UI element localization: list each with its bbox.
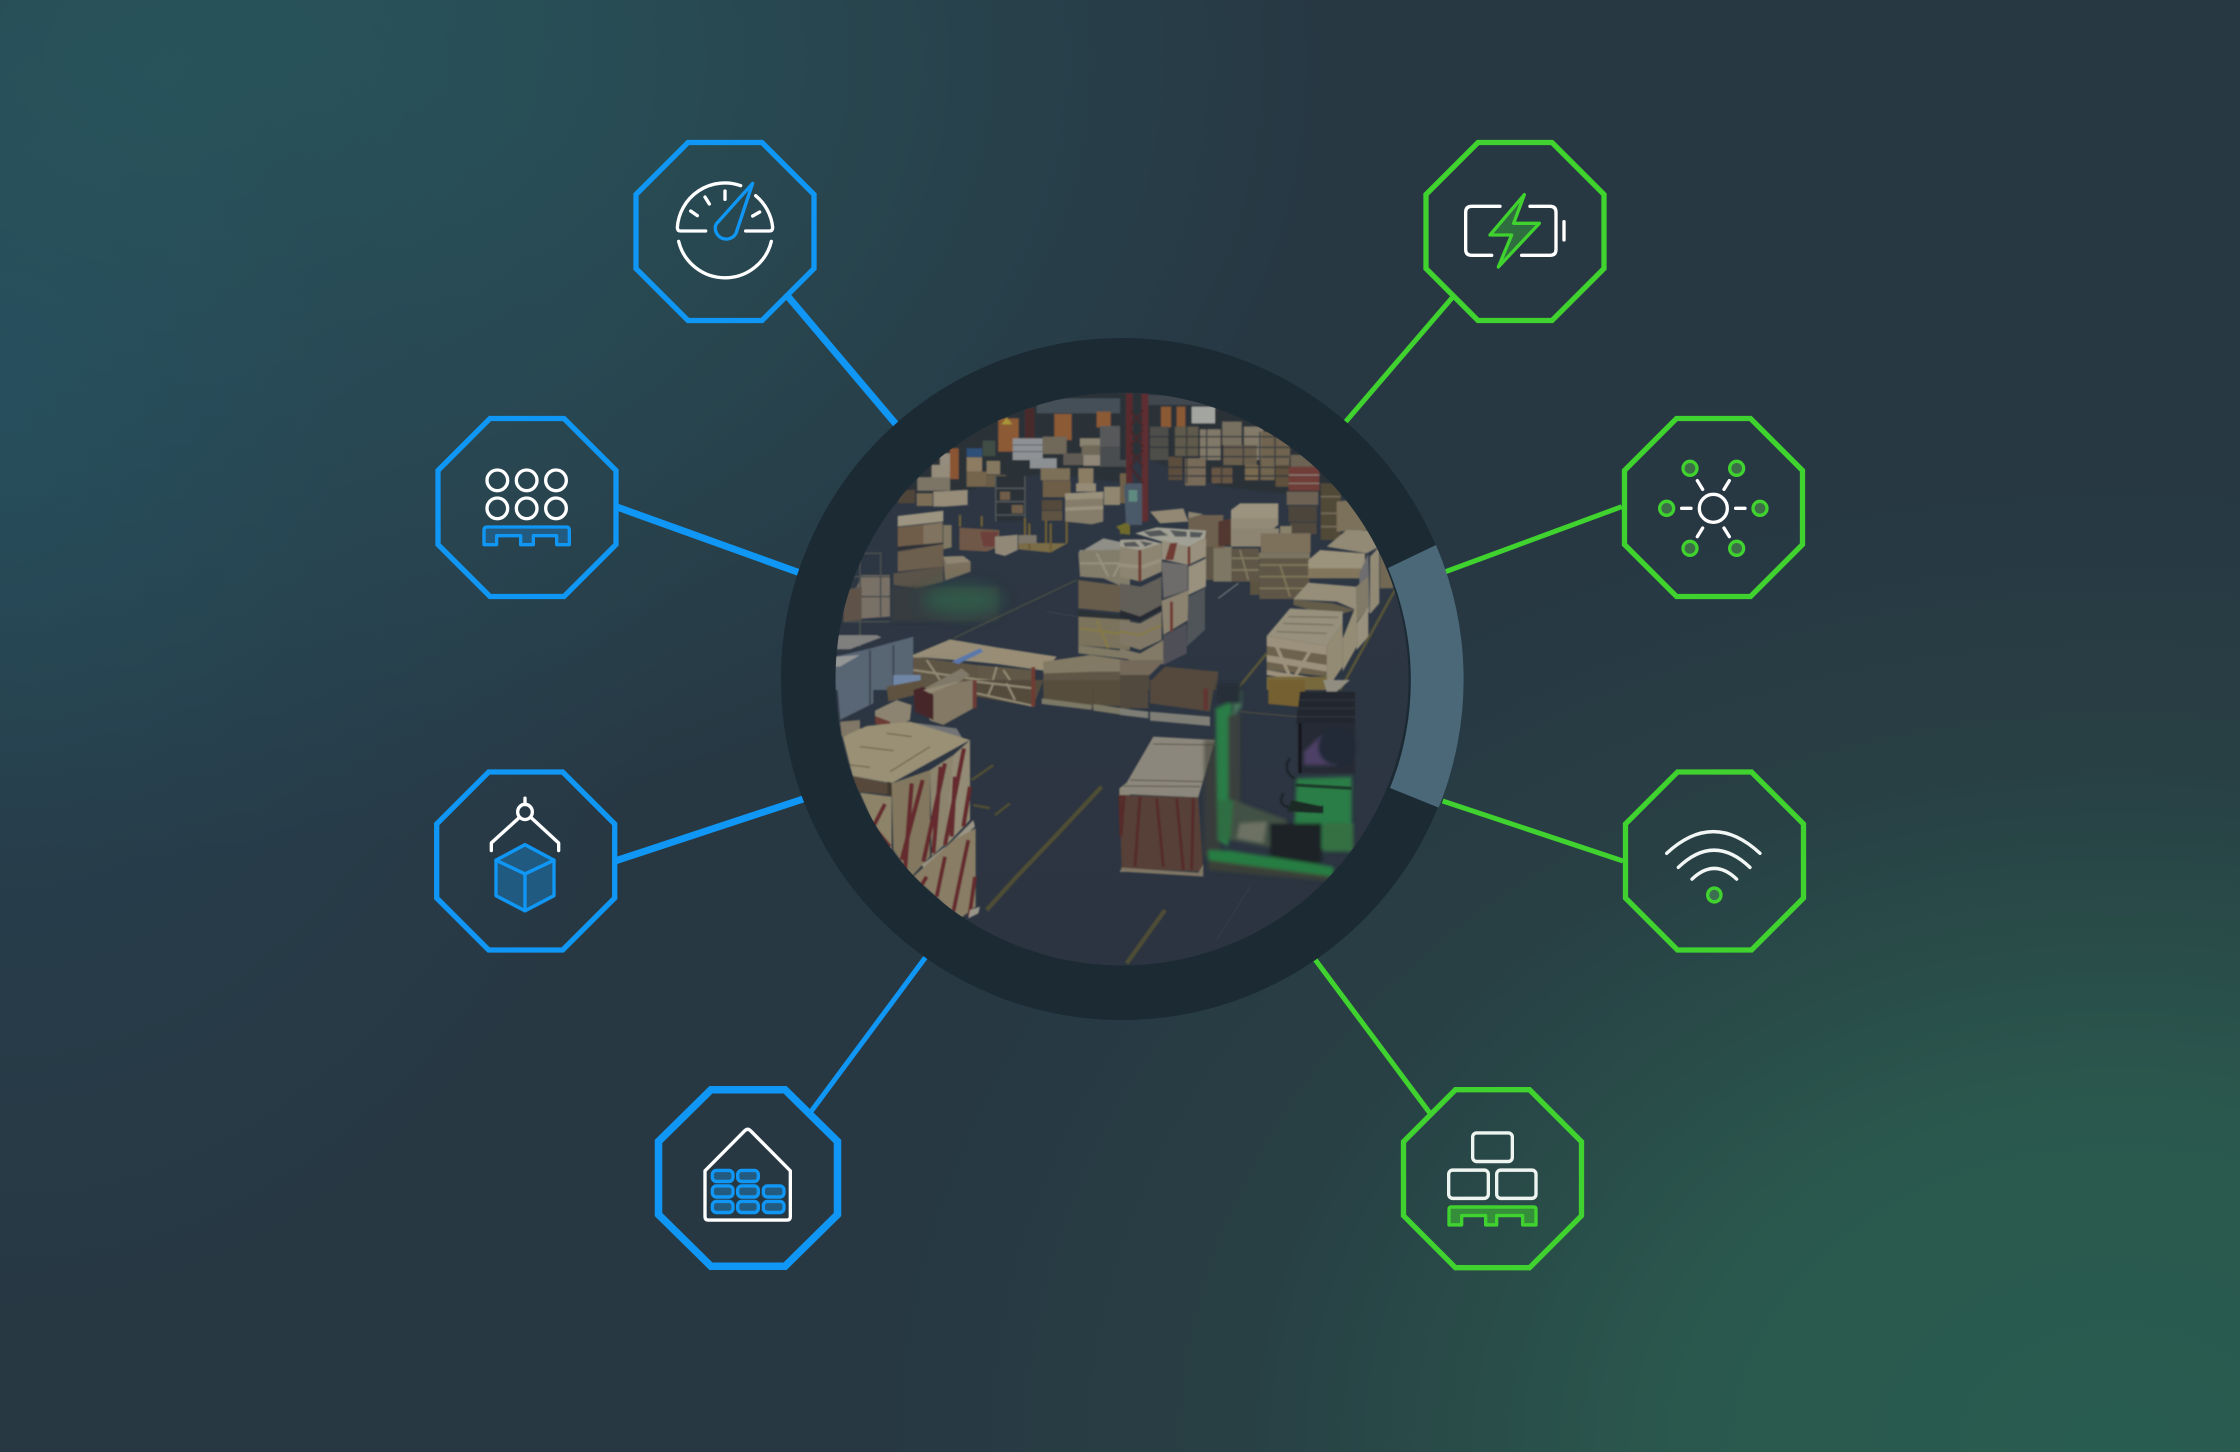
bottom left boxes <box>1120 660 1165 675</box>
floor markings <box>987 787 1102 910</box>
photo quadrant: lower right <box>1120 680 1355 963</box>
octagon frame: wifi <box>1626 772 1804 950</box>
right box edge <box>1120 838 1121 839</box>
load crate <box>1120 737 1215 797</box>
warehouse photo in centre circle <box>830 390 1420 980</box>
connector: pallet circles to hub <box>617 507 803 574</box>
hub and spoke diagram <box>434 140 1806 1270</box>
icon: speed gauge <box>677 183 773 278</box>
octagon frame: network <box>1624 418 1802 596</box>
octagon frame: battery <box>1426 142 1604 320</box>
photo quadrant: lower left <box>837 680 1130 920</box>
left pallets <box>898 511 943 527</box>
connector: wifi to hub <box>1443 801 1623 861</box>
photo quadrant: upper left <box>830 390 1130 690</box>
node: crane lifting box <box>437 772 615 950</box>
front big box <box>840 720 860 737</box>
green blur <box>892 587 998 622</box>
columns <box>1126 393 1133 483</box>
right rows of crates <box>1327 530 1379 553</box>
centre stack top left <box>1078 548 1131 586</box>
node: wifi <box>1626 772 1804 950</box>
slate ring segment <box>1388 545 1464 808</box>
octagon frame: gauge <box>636 142 814 320</box>
node: network hub <box>1624 418 1802 596</box>
node: pallet of circles <box>438 418 616 596</box>
icon: charging battery <box>1466 195 1564 267</box>
photo quadrant: upper right <box>1120 390 1395 690</box>
connector: stacked boxes to hub <box>1312 955 1430 1113</box>
node: stacked boxes <box>1404 1090 1582 1268</box>
icon: warehouse with bricks <box>705 1129 790 1220</box>
icon: crane claw with cube <box>491 798 559 911</box>
octagon frame: stacked boxes <box>1404 1090 1582 1268</box>
icon: wifi signal <box>1667 832 1760 902</box>
octagon frame: pallet of circles <box>438 418 616 596</box>
dark ring around photo <box>808 365 1436 993</box>
left metal rack <box>856 574 891 620</box>
cabinet <box>835 637 913 690</box>
node: warehouse <box>658 1090 838 1266</box>
icon: rolls on pallet <box>484 470 569 545</box>
floor streak <box>953 580 1077 638</box>
connector: warehouse to hub <box>811 951 930 1112</box>
connector: network to hub <box>1442 507 1622 573</box>
icon: network nodes <box>1660 461 1767 555</box>
node: battery <box>1426 142 1604 320</box>
node: gauge <box>636 142 814 320</box>
connector: gauge to hub <box>787 295 900 429</box>
floor lines <box>1237 590 1395 690</box>
stack front <box>1135 527 1206 547</box>
connector: crane to hub <box>615 797 808 861</box>
icon: boxes on pallet <box>1449 1133 1536 1225</box>
octagon frame: warehouse <box>658 1090 838 1266</box>
octagon frame: crane <box>437 772 615 950</box>
middle crates <box>1231 503 1278 522</box>
forklift group <box>1204 683 1353 882</box>
floor marking <box>1127 910 1165 963</box>
mid crate row <box>913 639 1057 671</box>
connector: battery to hub <box>1342 297 1453 426</box>
